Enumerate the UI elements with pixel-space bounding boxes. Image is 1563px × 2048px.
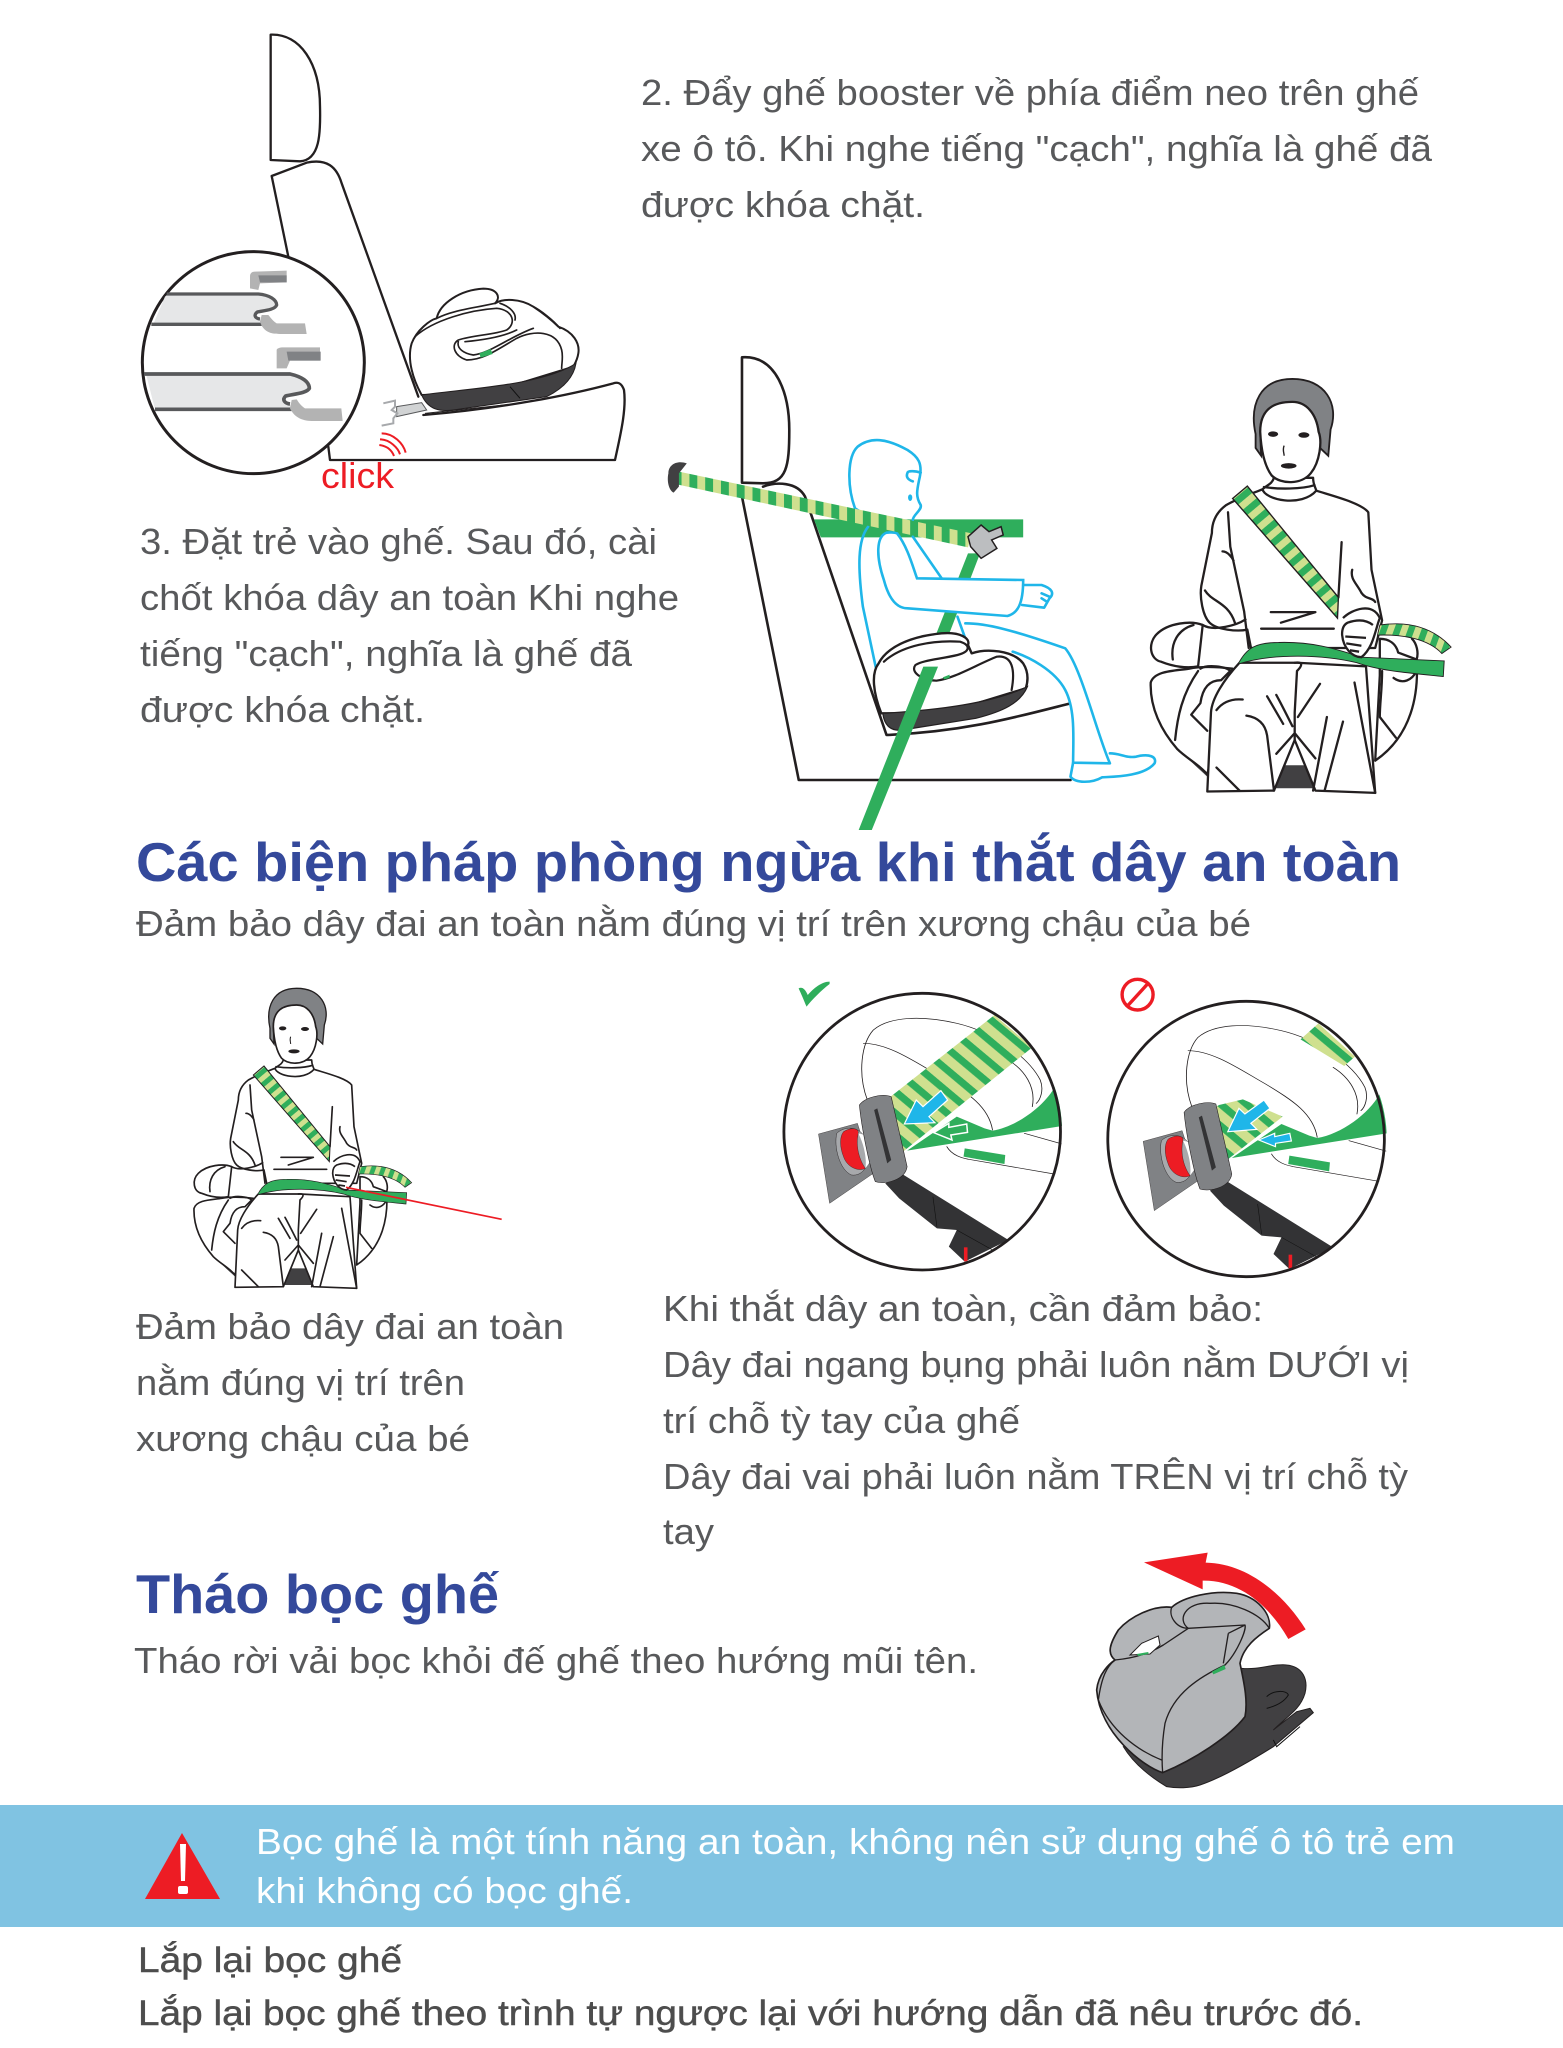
icon: check mark <box>799 982 830 1007</box>
dark seat base <box>1123 1665 1313 1788</box>
belt anchor <box>668 462 687 493</box>
warning text: Bọc ghế là một tính năng an toàn, không nên sử dụng ghế ô tô trẻ em <box>256 1821 1455 1862</box>
text: reassemble cover: Lắp lại bọc ghế <box>138 1941 402 1980</box>
text: pelvis note: xương chậu của bé <box>136 1418 470 1459</box>
text: belt rules: tay <box>663 1511 714 1552</box>
detail circle: anchor hooks <box>142 252 364 474</box>
buckle tongue <box>968 525 1003 558</box>
step 2 text: được khóa chặt. <box>641 184 925 225</box>
illustration: child with pelvis line <box>194 988 502 1288</box>
illustration: booster seat clicking into car seat anchors <box>142 35 625 474</box>
icon: click sound waves <box>379 433 406 456</box>
step 3 text: tiếng "cạch", nghĩa là ghế đã <box>140 633 633 674</box>
shoulder belt striped <box>675 472 972 547</box>
car seat outline <box>742 357 1070 780</box>
anchor connector <box>382 401 427 426</box>
heading: remove cover: Tháo bọc ghế <box>136 1563 499 1625</box>
illustration: removing seat cover <box>1097 1553 1313 1788</box>
step 2 text <box>641 72 1433 225</box>
text: belt rules <box>663 1288 1409 1552</box>
lap belt band <box>814 519 1023 537</box>
warning band <box>0 1805 1563 1927</box>
step 3 text <box>140 521 679 730</box>
text: pelvis note: Đảm bảo dây đai an toàn <box>136 1306 564 1347</box>
text: belt rules: Dây đai ngang bụng phải luôn nằm DƯỚI vị <box>663 1344 1409 1385</box>
text: belt rules: Khi thắt dây an toàn, cần đảm bảo: <box>663 1288 1263 1329</box>
text: pelvis note: nằm đúng vị trí trên <box>136 1362 465 1403</box>
icon: warning triangle <box>145 1833 220 1899</box>
detail circle: incorrect belt position <box>1108 1001 1387 1277</box>
grey cover <box>1097 1592 1270 1773</box>
warning text: khi không có bọc ghế. <box>256 1870 633 1911</box>
detail circle: correct belt position <box>784 993 1062 1270</box>
illustration: seated child front view <box>1151 379 1451 793</box>
text: pelvis note <box>136 1306 564 1459</box>
step 3 text: chốt khóa dây an toàn Khi nghe <box>140 577 679 618</box>
text: remove cover instruction: Tháo rời vải bọc khỏi đế ghế theo hướng mũi tên. <box>134 1640 978 1681</box>
booster seat <box>874 633 1027 730</box>
diagonal belt over booster <box>859 667 938 830</box>
icon: prohibited sign <box>1122 979 1153 1010</box>
red arrow <box>1144 1553 1306 1639</box>
warning text <box>256 1821 1455 1911</box>
booster seat <box>410 289 579 413</box>
belt upper segment <box>926 553 980 660</box>
step 3 text: được khóa chặt. <box>140 689 425 730</box>
step 3 text: 3. Đặt trẻ vào ghế. Sau đó, cài <box>140 521 657 562</box>
text: reassemble cover <box>138 1941 1363 2033</box>
child outline <box>849 440 1155 782</box>
label: click: click <box>321 455 395 496</box>
step 2 text: xe ô tô. Khi nghe tiếng "cạch", nghĩa là ghế đã <box>641 128 1433 169</box>
step 2 text: 2. Đẩy ghế booster về phía điểm neo trên ghế <box>641 72 1419 113</box>
heading: belt precautions: Các biện pháp phòng ngừa khi thắt dây an toàn <box>136 831 1401 893</box>
text: belt rules: Dây đai vai phải luôn nằm TRÊN vị trí chỗ tỳ <box>663 1456 1408 1497</box>
car seat outline <box>271 35 625 460</box>
text: belt rules: trí chỗ tỳ tay của ghế <box>663 1400 1020 1441</box>
illustration: child on booster in car seat with belt <box>668 357 1155 830</box>
text: reassemble cover: Lắp lại bọc ghế theo trình tự ngược lại với hướng dẫn đã nêu trước đó. <box>138 1994 1363 2033</box>
subheading text: Đảm bảo dây đai an toàn nằm đúng vị trí trên xương chậu của bé <box>136 903 1251 944</box>
